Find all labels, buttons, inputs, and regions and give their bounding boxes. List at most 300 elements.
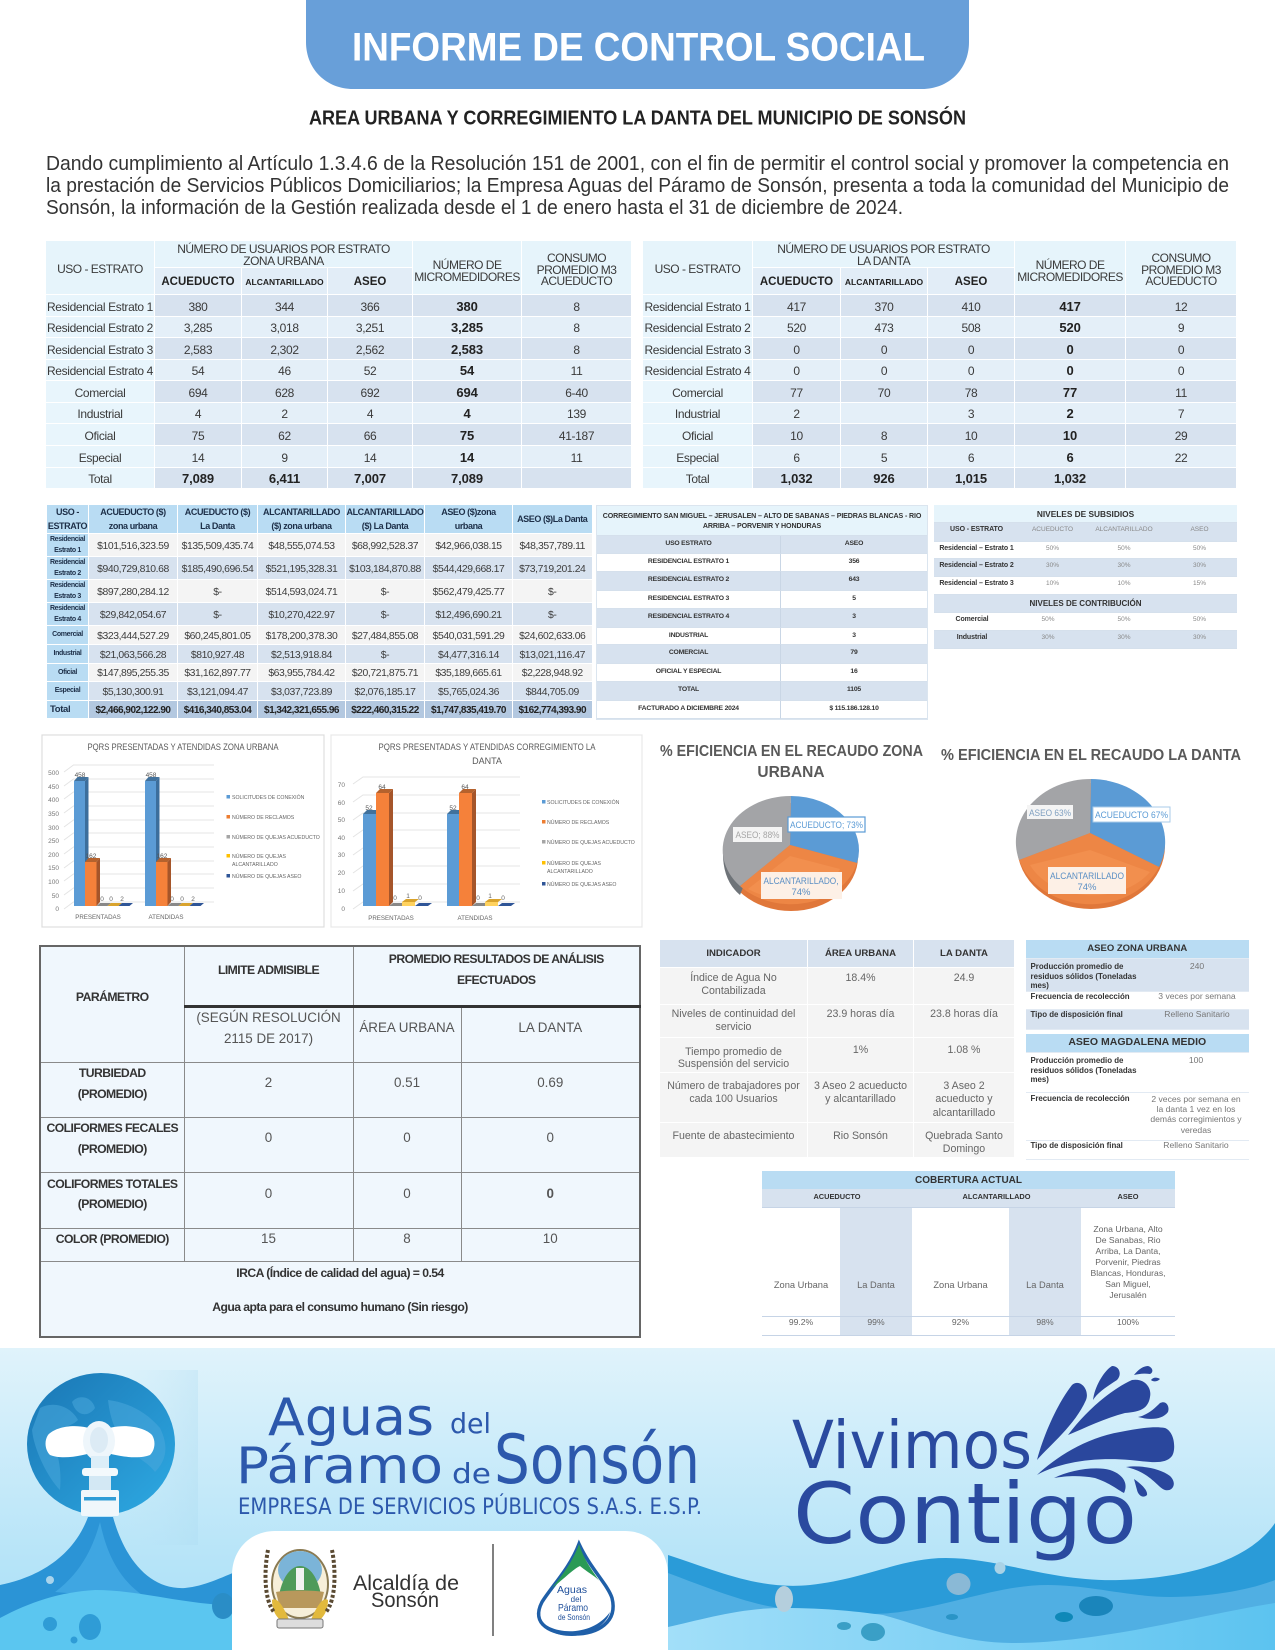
table: usuarios por estrato zona urbana: Residencial Estrato 3: [47, 343, 153, 357]
table: calidad del agua: EFECTUADOS: [457, 973, 535, 987]
table: niveles de subsidios y contribución: 30%: [1193, 562, 1206, 569]
table: niveles de subsidios y contribución: 50%: [1193, 545, 1206, 552]
table: aseo Magdalena Medio: la danta 1 vez en los: [1157, 1104, 1235, 1114]
table: usuarios por estrato zona urbana: ALCANTARILLADO: [245, 277, 324, 287]
table: indicadores: Índice de Agua No: [690, 972, 777, 984]
table: facturación por servicio: $897,280,284.12: [97, 586, 169, 598]
table: usuarios por estrato zona urbana: 62: [278, 429, 291, 443]
table: usuarios por estrato La Danta: ASEO: [955, 276, 987, 288]
bars presentadas: 162: [86, 853, 97, 860]
table: facturación por servicio: ($) zona urbana: [271, 521, 332, 531]
table: usuarios por estrato La Danta: 0: [881, 364, 887, 378]
table: corregimientos aseo: RESIDENCIAL ESTRATO 3: [648, 595, 729, 602]
table: usuarios por estrato La Danta: Residencial Estrato 2: [644, 321, 751, 335]
table: usuarios por estrato La Danta: 22: [1175, 451, 1187, 465]
table: facturación por servicio: $10,270,422.97: [268, 610, 335, 620]
label acueducto: [1093, 807, 1170, 822]
table: calidad del agua: (PROMEDIO): [78, 1086, 147, 1100]
legend: SOLICITUDES DE CONEXIÓN: [547, 799, 620, 806]
bar chart: PQRS zona urbana: 0: [55, 906, 59, 913]
table: corregimientos aseo: RESIDENCIAL ESTRATO 2: [648, 576, 729, 583]
bars atendidas: [447, 784, 515, 906]
table: niveles de subsidios y contribución: 15%: [1193, 580, 1206, 587]
table: facturación por servicio: $4,477,316.14: [438, 650, 499, 660]
table: facturación por servicio: $416,340,853.04: [184, 705, 251, 716]
logo: Aguas del Páramo de Sonsón: del: [450, 1407, 491, 1440]
table: usuarios por estrato La Danta: 0: [793, 343, 800, 357]
bars atendidas: 0: [501, 895, 505, 902]
table: usuarios por estrato La Danta: 0: [1178, 364, 1184, 378]
table: calidad del agua: LA DANTA: [518, 1020, 582, 1035]
table: cobertura actual: 99%: [867, 1317, 885, 1327]
legend: SOLICITUDES DE CONEXIÓN: [232, 794, 305, 801]
table: usuarios por estrato zona urbana: Residencial Estrato 1: [47, 300, 153, 314]
table: aseo Magdalena Medio: 100: [1189, 1055, 1203, 1065]
table: facturación por servicio: $2,513,918.84: [271, 650, 332, 660]
table: usuarios por estrato La Danta: 0: [1066, 363, 1074, 378]
Alcaldía de Sonsón text: Alcaldía de: [353, 1572, 459, 1595]
bars presentadas: 0: [393, 895, 397, 902]
table: usuarios por estrato La Danta: 10: [790, 429, 803, 443]
table: usuarios por estrato zona urbana: 3,285: [451, 320, 483, 335]
table: cobertura actual: 92%: [952, 1317, 969, 1327]
table: usuarios por estrato zona urbana: 694: [188, 386, 207, 400]
table: aseo zona urbana: 240: [1190, 961, 1204, 971]
table: usuarios por estrato La Danta: 6: [793, 451, 800, 465]
intro paragraph: [46, 153, 1229, 219]
bar chart: PQRS La Danta: 10: [338, 888, 345, 895]
table: usuarios por estrato La Danta: NÚMERO DE USUARIOS POR ESTRATO: [777, 242, 990, 256]
table: usuarios por estrato zona urbana: 41-187: [559, 429, 594, 443]
table: niveles de subsidios y contribución: [934, 505, 1237, 649]
icon: escudo Alcaldía de Sonsón: [266, 1550, 334, 1628]
bars presentadas: 52: [365, 805, 373, 812]
table: facturación por servicio: $31,162,897.77: [184, 668, 251, 679]
table: facturación por servicio: $222,460,315.22: [351, 705, 419, 716]
table: aseo Magdalena Medio: Frecuencia de recolección: [1030, 1094, 1130, 1103]
table: usuarios por estrato La Danta: MICROMEDIDORES: [1017, 270, 1123, 284]
table: facturación por servicio: $544,429,668.17: [433, 564, 504, 574]
table: facturación por servicio: Industrial: [53, 650, 82, 657]
table: usuarios por estrato zona urbana: 75: [460, 428, 474, 443]
table: calidad del agua: Agua apta para el consumo humano (Sin riesgo): [212, 1300, 468, 1314]
logo: Vivimos Contigo: [792, 1366, 1174, 1563]
table: cobertura actual: ALCANTARILLADO: [962, 1192, 1030, 1201]
table: facturación por servicio: $1,747,835,419.70: [431, 705, 506, 716]
table: facturación por servicio: $178,200,378.30: [266, 630, 337, 642]
table: facturación por servicio: $5,765,024.36: [438, 686, 499, 698]
table: usuarios por estrato La Danta: 417: [787, 300, 806, 314]
table: usuarios por estrato La Danta: 6: [1066, 450, 1074, 465]
bar chart: PQRS zona urbana: 50: [52, 893, 59, 900]
icon: gota Aguas del Páramo: [538, 1544, 613, 1636]
table: calidad del agua: TURBIEDAD: [79, 1066, 146, 1080]
table: cobertura actual: 98%: [1036, 1317, 1054, 1327]
table: usuarios por estrato La Danta: 6: [968, 451, 974, 465]
table: usuarios por estrato La Danta: CONSUMO: [1151, 251, 1211, 265]
label alcantarillado: 74%: [1077, 882, 1097, 893]
table: usuarios por estrato zona urbana: 2,562: [356, 343, 384, 357]
table: facturación por servicio: $1,342,321,655.96: [264, 705, 339, 716]
table: usuarios por estrato La Danta: 1,015: [955, 471, 987, 486]
table: usuarios por estrato La Danta: 0: [881, 343, 887, 357]
table: cobertura actual: Jerusalén: [1109, 1290, 1147, 1300]
table: aseo zona urbana: [1026, 940, 1249, 1030]
bar chart: PQRS La Danta: 30: [338, 852, 345, 859]
table: facturación por servicio: $323,444,527.29: [97, 630, 169, 642]
table: aseo Magdalena Medio: Producción promedio de residuos sólidos (Toneladas mes): [1030, 1056, 1136, 1084]
table: usuarios por estrato La Danta: PROMEDIO M3: [1141, 263, 1221, 277]
table: usuarios por estrato zona urbana: 9: [281, 451, 288, 465]
bar chart: PQRS La Danta: 60: [338, 800, 345, 807]
bar chart: PQRS zona urbana: 300: [48, 825, 59, 832]
table: usuarios por estrato La Danta: 508: [962, 321, 980, 335]
legend: NÚMERO DE QUEJAS ACUEDUCTO: [232, 834, 320, 841]
table: facturación por servicio: Residencial Estrato 3: [50, 582, 85, 600]
table: usuarios por estrato La Danta: 1,032: [780, 471, 813, 486]
bars presentadas: 0: [109, 896, 113, 903]
table: niveles de subsidios y contribución: 30%: [1117, 634, 1130, 641]
table: facturación por servicio: Total: [50, 704, 70, 715]
table: facturación por servicio: $-: [213, 586, 222, 598]
table: usuarios por estrato zona urbana: 2,583: [184, 343, 212, 357]
bar chart: PQRS La Danta: [331, 735, 642, 927]
table: indicadores: Niveles de continuidad del: [672, 1008, 795, 1020]
table: corregimientos aseo: OFICIAL Y ESPECIAL: [656, 668, 721, 675]
table: usuarios por estrato zona urbana: 4: [195, 407, 201, 421]
table: calidad del agua: PROMEDIO RESULTADOS DE ANÁLISIS: [389, 952, 604, 966]
logo: Vivimos Contigo: Vivimos: [792, 1407, 1032, 1484]
table: calidad del agua: 10: [543, 1230, 558, 1246]
table: usuarios por estrato La Danta: ACUEDUCTO: [760, 276, 833, 288]
table: aseo Magdalena Medio: [1026, 1034, 1249, 1160]
table: niveles de subsidios y contribución: NIVELES DE CONTRIBUCIÓN: [1030, 599, 1142, 608]
table: facturación por servicio: $27,484,855.08: [352, 630, 418, 642]
table: niveles de subsidios y contribución: 50%: [1046, 545, 1059, 552]
bars presentadas: 1: [406, 893, 410, 900]
table: facturación por servicio: $2,228,948.92: [522, 668, 583, 679]
table: calidad del agua: [39, 945, 641, 1338]
logo: Aguas del Páramo de Sonsón: Aguas: [268, 1388, 434, 1448]
table: usuarios por estrato La Danta: 0: [968, 343, 974, 357]
table: usuarios por estrato La Danta: 2: [1066, 406, 1074, 421]
table: calidad del agua: 0: [265, 1186, 272, 1201]
table: usuarios por estrato zona urbana: 6,411: [269, 471, 300, 486]
table: usuarios por estrato La Danta: 410: [962, 300, 980, 314]
table: usuarios por estrato zona urbana: 7,089: [182, 471, 214, 486]
table: facturación por servicio: Comercial: [52, 631, 83, 638]
table: facturación por servicio: $42,966,038.15: [435, 540, 502, 552]
table: usuarios por estrato zona urbana: 4: [367, 407, 373, 421]
label acueducto: [788, 817, 865, 832]
table: usuarios por estrato La Danta: 77: [790, 386, 803, 400]
title banner: [306, 0, 969, 89]
label alcantarillado: [1048, 867, 1126, 894]
table: calidad del agua: 0: [547, 1130, 554, 1145]
table: corregimientos aseo: 16: [850, 668, 858, 675]
table: indicadores: alcantarillado: [933, 1107, 995, 1119]
bar chart: PQRS La Danta: PRESENTADAS: [368, 915, 414, 922]
table: facturación por servicio: $562,479,425.77: [433, 586, 504, 598]
table: indicadores: 18.4%: [845, 972, 876, 984]
table: cobertura actual: ACUEDUCTO: [813, 1192, 861, 1201]
label alcantarillado: [761, 872, 842, 899]
legend: [226, 794, 320, 880]
table: facturación por servicio: $3,037,723.89: [271, 686, 332, 698]
table: cobertura actual: Zona Urbana, Alto: [1093, 1224, 1163, 1234]
table: indicadores: Tiempo promedio de: [685, 1046, 782, 1058]
table: usuarios por estrato zona urbana: 54: [460, 363, 474, 378]
table: cobertura actual: Porvenir, Piedras: [1095, 1256, 1161, 1266]
bars atendidas: 2: [191, 896, 195, 903]
table: usuarios por estrato zona urbana: 14: [364, 451, 376, 465]
table: usuarios por estrato zona urbana: 14: [192, 451, 204, 465]
table: usuarios por estrato zona urbana: ASEO: [354, 276, 386, 288]
table: niveles de subsidios y contribución: Residencial – Estrato 2: [939, 562, 1014, 569]
table: facturación por servicio: $20,721,875.71: [352, 668, 418, 679]
table: usuarios por estrato La Danta: USO - ESTRATO: [655, 262, 740, 276]
bars atendidas: 458: [146, 772, 157, 779]
table: usuarios por estrato La Danta: 0: [793, 364, 800, 378]
table: niveles de subsidios y contribución: 50%: [1041, 616, 1054, 623]
table: aseo zona urbana: Frecuencia de recolección: [1030, 992, 1130, 1001]
bar chart: PQRS zona urbana: 450: [48, 784, 59, 791]
table: facturación por servicio: $135,509,435.74: [182, 540, 253, 552]
table: usuarios por estrato La Danta: ALCANTARILLADO: [845, 277, 923, 287]
table: usuarios por estrato zona urbana: 344: [275, 300, 294, 314]
table: corregimientos aseo: 643: [849, 576, 859, 583]
white logo panel: [232, 1531, 668, 1650]
table: aseo Magdalena Medio: ASEO MAGDALENA MEDIO: [1068, 1036, 1206, 1048]
legend: NÚMERO DE QUEJAS ASEO: [547, 881, 616, 888]
table: calidad del agua: 2: [265, 1075, 272, 1090]
bar chart: PQRS zona urbana: PRESENTADAS: [75, 914, 121, 921]
table: facturación por servicio: $21,063,566.28: [100, 650, 166, 660]
table: indicadores: ÁREA URBANA: [825, 948, 896, 959]
table: calidad del agua: COLIFORMES TOTALES: [47, 1176, 177, 1190]
table: corregimientos aseo: 1105: [847, 686, 861, 693]
table: facturación por servicio: Oficial: [58, 669, 77, 676]
table: niveles de subsidios y contribución: 30%: [1193, 634, 1206, 641]
table: usuarios por estrato zona urbana: 694: [456, 385, 478, 400]
table: niveles de subsidios y contribución: 10%: [1046, 580, 1059, 587]
table: indicadores: Número de trabajadores por: [667, 1080, 800, 1092]
table: aseo zona urbana: ASEO ZONA URBANA: [1087, 943, 1187, 954]
bars atendidas: 162: [157, 853, 168, 860]
table: facturación por servicio: $2,466,902,122.90: [96, 705, 170, 716]
table: niveles de subsidios y contribución: 50%: [1193, 616, 1206, 623]
table: facturación por servicio: zona urbana: [109, 521, 157, 531]
table: corregimientos aseo: [596, 505, 928, 720]
table: usuarios por estrato zona urbana: 6-40: [565, 386, 588, 400]
pie chart: eficiencia zona urbana: URBANA: [757, 764, 825, 781]
legend: NÚMERO DE QUEJAS ACUEDUCTO: [547, 839, 635, 846]
table: cobertura actual: Blancas, Honduras,: [1090, 1268, 1166, 1278]
icon: globe and water tap: [27, 1373, 175, 1516]
table: cobertura actual: San Miguel,: [1105, 1278, 1151, 1288]
bars presentadas: 0: [100, 896, 104, 903]
table: corregimientos aseo: TOTAL: [678, 686, 699, 693]
table: niveles de subsidios y contribución: 50%: [1117, 545, 1130, 552]
table: cobertura actual: Zona Urbana: [774, 1280, 828, 1290]
pie chart: eficiencia La Danta: % EFICIENCIA EN EL RECAUDO LA DANTA: [941, 747, 1241, 764]
table: facturación por servicio: ASEO ($)zona: [441, 507, 496, 517]
table: calidad del agua: 0: [547, 1186, 554, 1201]
bar chart: PQRS zona urbana: 100: [48, 879, 59, 886]
table: usuarios por estrato La Danta: [643, 241, 1236, 488]
table: calidad del agua: 2115 DE 2017): [224, 1030, 313, 1046]
table: usuarios por estrato La Danta: 473: [874, 321, 893, 335]
table: facturación por servicio: Especial: [55, 687, 80, 694]
bars atendidas: 0: [170, 896, 174, 903]
table: niveles de subsidios y contribución: ACUEDUCTO: [1032, 526, 1073, 533]
table: indicadores: servicio: [716, 1021, 751, 1033]
bar chart: PQRS La Danta: 50: [338, 817, 345, 824]
table: facturación por servicio: ALCANTARILLADO: [263, 507, 340, 517]
table: indicadores: Suspensión del servicio: [678, 1058, 789, 1070]
table: indicadores: 1%: [853, 1044, 868, 1056]
table: facturación por servicio: $2,076,185.17: [354, 686, 416, 698]
label aseo: ASEO 63%: [1029, 808, 1071, 819]
bubbles: [43, 1562, 1113, 1644]
table: facturación por servicio: $5,130,300.91: [102, 686, 164, 698]
bar chart: PQRS zona urbana: 500: [48, 770, 59, 777]
table: usuarios por estrato zona urbana: ZONA URBANA: [243, 254, 324, 268]
table: aseo Magdalena Medio: veredas: [1181, 1125, 1211, 1135]
table: facturación por servicio: $514,593,024.71: [266, 586, 337, 598]
legend: [542, 799, 635, 888]
bars atendidas: 1: [488, 893, 492, 900]
bar chart: PQRS La Danta: 70: [338, 782, 345, 789]
table: usuarios por estrato La Danta: 0: [1178, 343, 1184, 357]
table: usuarios por estrato zona urbana: 14: [460, 450, 474, 465]
table: usuarios por estrato La Danta: 11: [1175, 386, 1187, 400]
table: indicadores: acueducto y: [935, 1093, 993, 1105]
table: cobertura actual: 99.2%: [789, 1317, 813, 1327]
table: facturación por servicio: $-: [548, 586, 556, 598]
table: facturación por servicio: $-: [381, 610, 389, 620]
bar chart: PQRS La Danta: PQRS PRESENTADAS Y ATENDIDAS CORREGIMIENTO LA: [378, 742, 596, 752]
table: facturación por servicio: $3,121,094.47: [187, 686, 248, 698]
intro paragraph: Sonsón, la información de la Gestión realizada desde el 1 de enero hasta el 31 de diciembre de 2024.: [46, 197, 903, 219]
table: corregimientos aseo: 3: [852, 613, 856, 620]
bars presentadas: 64: [378, 784, 386, 791]
table: indicadores: Domingo: [943, 1143, 985, 1155]
legend: NÚMERO DE RECLAMOS: [547, 819, 610, 826]
table: niveles de subsidios y contribución: 10%: [1117, 580, 1130, 587]
icon: gota Aguas del Páramo: Páramo: [558, 1602, 588, 1614]
table: usuarios por estrato La Danta: 2: [793, 407, 800, 421]
table: usuarios por estrato zona urbana: MICROMEDIDORES: [414, 270, 520, 284]
table: usuarios por estrato La Danta: 1,032: [1054, 471, 1086, 486]
table: aseo zona urbana: Tipo de disposición final: [1030, 1010, 1123, 1019]
table: usuarios por estrato La Danta: 926: [873, 471, 895, 486]
pie chart: eficiencia zona urbana: [660, 743, 923, 911]
table: usuarios por estrato La Danta: 0: [968, 364, 974, 378]
table: niveles de subsidios y contribución: 30%: [1046, 562, 1059, 569]
bars presentadas: [74, 772, 133, 906]
table: facturación por servicio: $68,992,528.37: [352, 540, 418, 552]
table: facturación por servicio: $-: [213, 610, 222, 620]
logo: Aguas del Páramo de Sonsón: Sonsón: [494, 1421, 700, 1500]
table: facturación por servicio: Residencial Estrato 2: [50, 559, 85, 576]
table: usuarios por estrato zona urbana: USO - ESTRATO: [57, 262, 143, 276]
label aseo: [733, 827, 782, 842]
table: usuarios por estrato zona urbana: 11: [571, 451, 582, 465]
table: corregimientos aseo: COMERCIAL: [669, 649, 708, 656]
table: calidad del agua: ÁREA URBANA: [359, 1020, 455, 1035]
table: indicadores: 23.9 horas día: [827, 1008, 894, 1020]
label alcantarillado: 74%: [791, 887, 811, 898]
table: usuarios por estrato zona urbana: Residencial Estrato 2: [47, 321, 153, 335]
table: calidad del agua: (PROMEDIO): [78, 1197, 147, 1211]
table: facturación por servicio: [47, 505, 592, 718]
table: corregimientos aseo: 5: [852, 595, 856, 602]
table: usuarios por estrato La Danta: 9: [1178, 321, 1184, 335]
table: aseo Magdalena Medio: Tipo de disposición final: [1030, 1141, 1123, 1150]
table: indicadores: y alcantarillado: [825, 1093, 896, 1105]
table: usuarios por estrato La Danta: 5: [881, 451, 887, 465]
table: usuarios por estrato zona urbana: 380: [188, 300, 207, 314]
bar chart: PQRS La Danta: ATENDIDAS: [458, 915, 492, 922]
table: usuarios por estrato zona urbana: 54: [192, 364, 204, 378]
table: usuarios por estrato zona urbana: 8: [573, 300, 580, 314]
table: niveles de subsidios y contribución: ALCANTARILLADO: [1095, 526, 1153, 533]
label acueducto: ACUEDUCTO; 73%: [790, 820, 863, 831]
bars atendidas: 64: [461, 784, 469, 791]
table: facturación por servicio: $-: [381, 586, 389, 598]
table: indicadores: [660, 940, 1014, 1157]
table: facturación por servicio: $48,555,074.53: [268, 540, 335, 552]
table: usuarios por estrato zona urbana: Comercial: [75, 386, 125, 400]
table: corregimientos aseo: 3: [852, 632, 856, 639]
table: corregimientos aseo: RESIDENCIAL ESTRATO 4: [648, 613, 729, 620]
table: cobertura actual: [762, 1171, 1175, 1336]
legend: NÚMERO DE QUEJAS: [232, 853, 286, 860]
table: usuarios por estrato La Danta: 77: [1063, 385, 1077, 400]
table: niveles de subsidios y contribución: ASEO: [1190, 526, 1209, 533]
table: usuarios por estrato La Danta: Residencial Estrato 3: [644, 343, 751, 357]
table: usuarios por estrato La Danta: 10: [1063, 428, 1077, 443]
table: facturación por servicio: ALCANTARILLADO: [347, 507, 423, 517]
title banner: INFORME DE CONTROL SOCIAL: [352, 26, 925, 70]
table: calidad del agua: 15: [261, 1230, 276, 1246]
legend: NÚMERO DE RECLAMOS: [232, 814, 295, 821]
table: cobertura actual: ASEO: [1118, 1192, 1138, 1201]
table: usuarios por estrato zona urbana: Especial: [79, 451, 121, 465]
table: facturación por servicio: $63,955,784.42: [268, 668, 335, 679]
table: facturación por servicio: $73,719,201.24: [519, 564, 585, 574]
table: facturación por servicio: $60,245,801.05: [184, 630, 251, 642]
table: usuarios por estrato La Danta: Industrial: [675, 407, 720, 421]
pie chart: eficiencia La Danta: [941, 747, 1241, 909]
table: usuarios por estrato zona urbana: 139: [567, 407, 586, 421]
legend: ALCANTARILLADO: [232, 862, 278, 868]
table: usuarios por estrato La Danta: ACUEDUCTO: [1145, 274, 1217, 288]
table: calidad del agua: (PROMEDIO): [78, 1142, 147, 1156]
table: facturación por servicio: $162,774,393.90: [518, 705, 586, 716]
table: facturación por servicio: $24,602,633.06: [519, 630, 585, 642]
logo: Aguas del Páramo de Sonsón: EMPRESA DE SERVICIOS PÚBLICOS S.A.S. E.S.P.: [238, 1494, 702, 1520]
intro paragraph: Dando cumplimiento al Artículo 1.3.4.6 de la Resolución 151 de 2001, con el fin de permitir el control social y promover la competencia en: [46, 153, 1229, 175]
table: usuarios por estrato zona urbana: 3,251: [356, 321, 384, 335]
label acueducto: ACUEDUCTO 67%: [1095, 810, 1168, 821]
intro paragraph: la prestación de Servicios Públicos Domiciliarios; la Empresa Aguas del Páramo de Sonsón, presenta a toda la comunidad del Municipio de: [46, 175, 1229, 197]
table: usuarios por estrato zona urbana: 46: [278, 364, 291, 378]
table: usuarios por estrato zona urbana: 75: [192, 429, 204, 443]
table: facturación por servicio: La Danta: [200, 521, 235, 531]
table: indicadores: Quebrada Santo: [925, 1130, 1003, 1142]
